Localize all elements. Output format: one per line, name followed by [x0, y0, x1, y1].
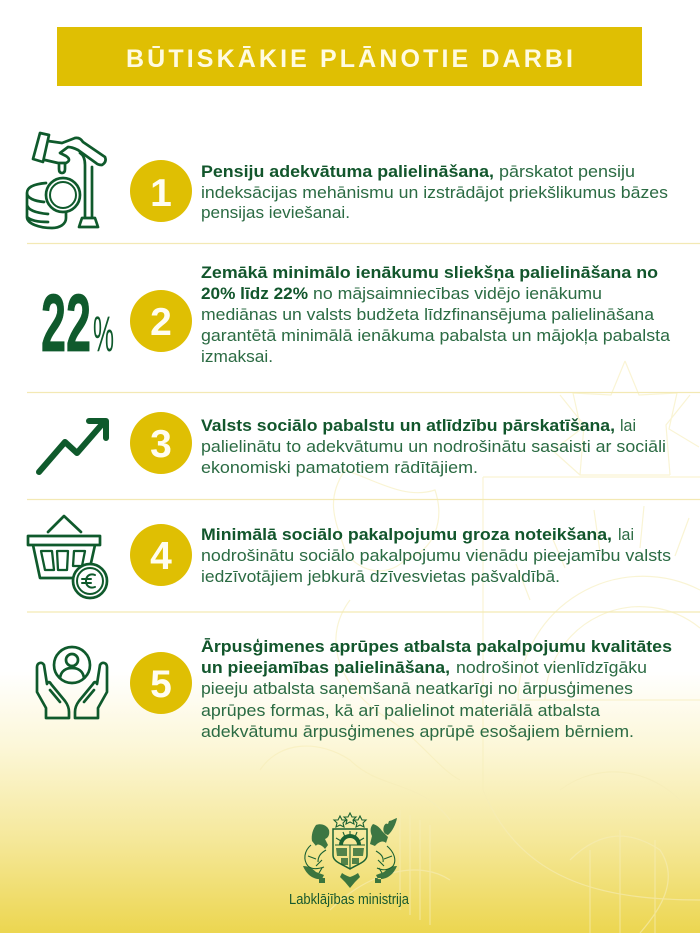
- divider lines: [27, 244, 700, 612]
- number badge 4: [130, 524, 192, 586]
- watermark emblem: [260, 361, 700, 933]
- text block 5: pieeju atbalsta saņemšanā neatkarīgi no ārpusģimenes: [201, 680, 633, 698]
- text block 1: pensijas ieviešanai.: [201, 204, 350, 222]
- lion: [305, 824, 329, 873]
- icon: rising arrow: [39, 421, 106, 472]
- title banner: [57, 27, 642, 86]
- text block 5: [201, 637, 672, 741]
- shield: [333, 829, 367, 869]
- ornament: [303, 866, 397, 888]
- item 1: [27, 133, 668, 228]
- text block 5: un pieejamības palielināšana,: [201, 659, 450, 677]
- item 2: [41, 264, 671, 369]
- text block 4: [201, 526, 671, 586]
- text block 4: lai: [618, 526, 634, 544]
- text block 2: no mājsaimniecības vidējo ienākumu: [313, 285, 602, 303]
- text block 5: Ārpusģimenes aprūpes atbalsta pakalpojumu kvalitātes: [201, 637, 672, 656]
- text block 2: [201, 264, 671, 366]
- number badge 5: 5: [150, 663, 172, 706]
- logo: coat of arms: [303, 813, 397, 888]
- title text: BŪTISKĀKIE PLĀNOTIE DARBI: [126, 45, 573, 73]
- number badge 5: [130, 652, 192, 714]
- text block 1: indeksācijas mehānismu un izstrādājot priekšlikumus bāzes: [201, 184, 668, 202]
- number badge 1: 1: [150, 172, 172, 215]
- text block 4: nodrošinātu sociālo pakalpojumu vienādu pieejamību valsts: [201, 547, 671, 565]
- text block 1: Pensiju adekvātuma palielināšana,: [201, 163, 494, 181]
- number badge 2: [130, 290, 192, 352]
- text block 2: 20% līdz 22%: [201, 285, 308, 303]
- item 2: %: [93, 306, 114, 362]
- item 4: [28, 516, 671, 598]
- text block 5: aprūpes formas, kā arī palielinot materiālā atbalsta: [201, 702, 601, 720]
- icon: basket with euro: [28, 516, 107, 598]
- text block 1: pārskatot pensiju: [499, 163, 635, 181]
- text block 3: lai: [620, 417, 636, 435]
- text block 2: garantētā minimālā ienākuma pabalsta un mājokļa pabalsta: [201, 327, 671, 345]
- sun: [339, 834, 361, 845]
- text block 5: nodrošinot vienlīdzīgāku: [456, 659, 647, 677]
- item 3: [39, 412, 666, 477]
- griffin: [370, 818, 397, 873]
- text block 2: Zemākā minimālo ienākumu sliekšņa palielināšana no: [201, 264, 658, 282]
- text block 3: ekonomiski pamatotiem rādītājiem.: [201, 459, 478, 477]
- number badge 4: 4: [150, 535, 172, 578]
- number badge 2: 2: [150, 301, 172, 344]
- text block 4: iedzīvotājiem jebkurā dzīvesvietas pašvaldībā.: [201, 568, 560, 586]
- text block 2: izmaksai.: [201, 348, 273, 366]
- logo caption: Labklājības ministrija: [289, 892, 410, 908]
- item 5: [37, 637, 672, 741]
- text block 5: adekvātumu ārpusģimenes aprūpē esošajiem bērniem.: [201, 723, 634, 741]
- number badge 3: 3: [150, 423, 172, 466]
- stars: [334, 813, 366, 827]
- text block 2: mediānas un valsts budžeta līdzfinansējuma palielināšana: [201, 306, 655, 324]
- text block 3: palielinātu to adekvātumu un nodrošinātu sasaisti ar sociāli: [201, 438, 666, 456]
- icon: 22 percent: 22: [41, 278, 91, 369]
- text block 3: Valsts sociālo pabalstu un atlīdzību pārskatīšana,: [201, 417, 615, 435]
- icon: hand, coins and cane: [27, 133, 106, 228]
- icon: hands holding person: [37, 647, 107, 718]
- number badge 3: [130, 412, 192, 474]
- text block 3: [201, 417, 666, 477]
- text block 4: Minimālā sociālo pakalpojumu groza noteikšana,: [201, 526, 612, 544]
- text block 1: [201, 163, 668, 222]
- number badge 1: [130, 160, 192, 222]
